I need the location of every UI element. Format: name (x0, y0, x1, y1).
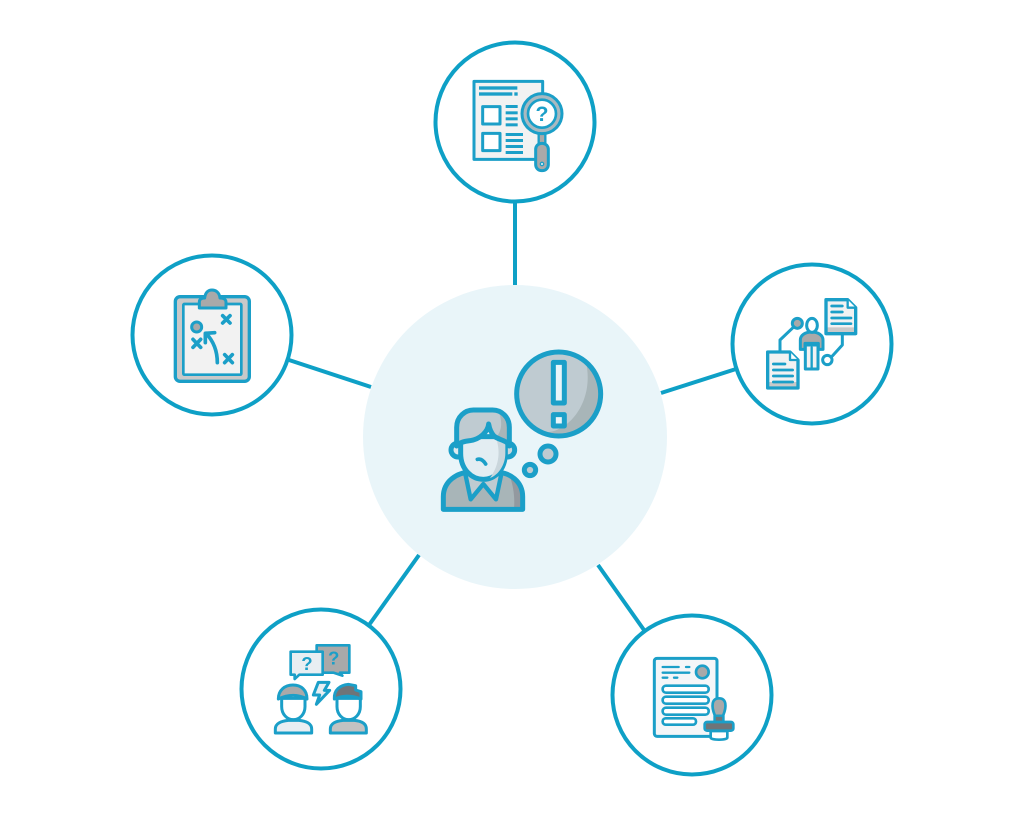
ears (451, 443, 465, 457)
magnifier lens (522, 94, 562, 134)
header lines (663, 667, 689, 678)
thought bubble with exclamation mark (517, 352, 601, 436)
stamp (705, 698, 733, 740)
links (780, 327, 842, 356)
icon: stamped document (654, 658, 733, 740)
small thought circles (524, 446, 556, 476)
paper (183, 304, 241, 375)
crosses (193, 316, 232, 363)
icon: clipboard with play diagram (175, 290, 249, 381)
left person (275, 685, 312, 733)
board (175, 297, 249, 381)
right person (330, 684, 366, 733)
central pale circle (363, 285, 667, 589)
face (461, 437, 505, 479)
arrow (205, 333, 217, 363)
clip (199, 290, 226, 308)
document page (654, 658, 717, 736)
back speech bubble: ? (328, 647, 339, 668)
icon: questionnaire under magnifying glass (474, 81, 562, 171)
icon: two people arguing (275, 645, 366, 733)
text lines (479, 86, 523, 154)
person (805, 345, 818, 369)
marker (192, 322, 202, 332)
form fields (663, 686, 709, 725)
question mark: ? (535, 102, 549, 126)
mouth (477, 459, 486, 464)
icon: person linked to documents (768, 300, 856, 388)
front speech bubble: ? (301, 653, 313, 674)
document (474, 81, 543, 159)
hair (457, 410, 509, 446)
body (443, 472, 523, 509)
node rings (132, 42, 892, 774)
upper document (826, 300, 856, 334)
icon: worried person with thought bubble (443, 352, 601, 509)
checkboxes (483, 107, 500, 124)
collar (465, 474, 501, 499)
lower document (768, 352, 798, 388)
lightning bolt (313, 682, 330, 704)
link nodes (792, 318, 802, 328)
seal (696, 666, 709, 678)
magnifier handle (539, 133, 545, 145)
connectors (289, 202, 736, 630)
